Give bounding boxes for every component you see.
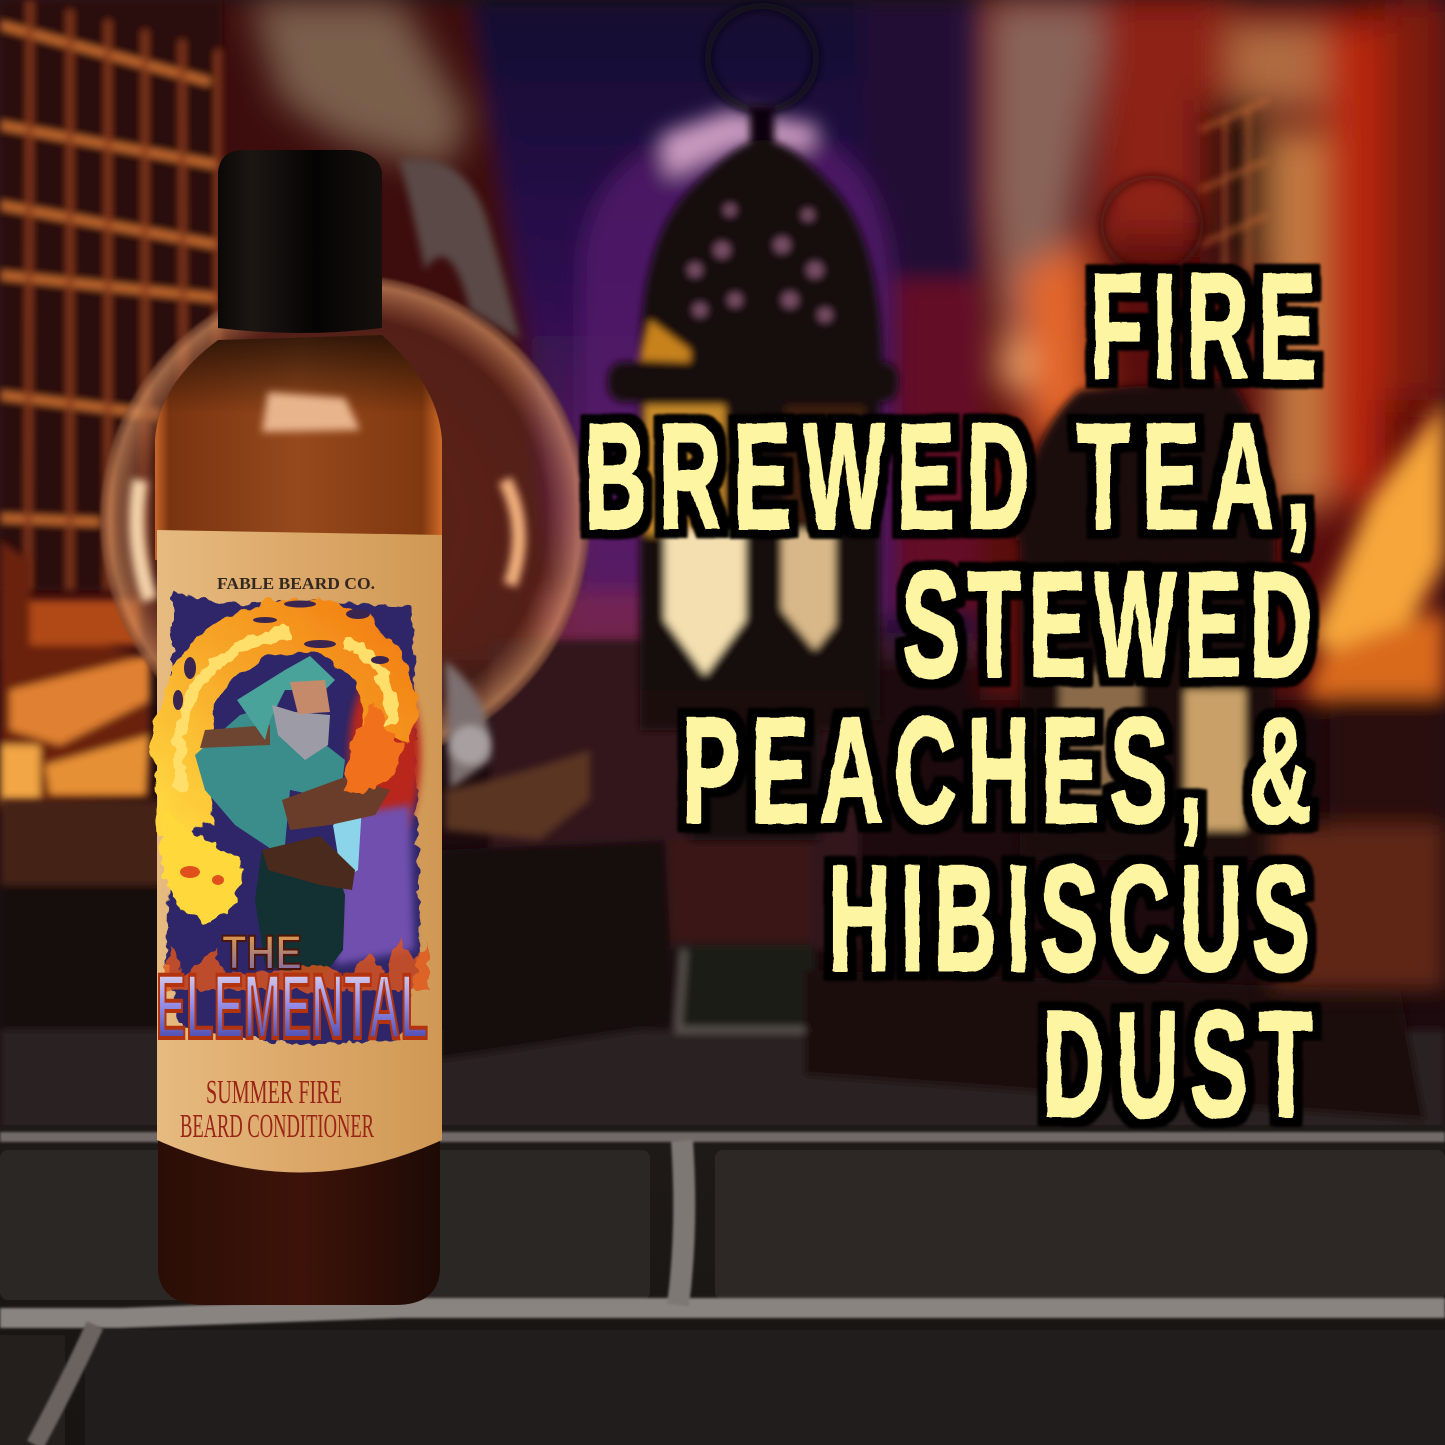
fire ring dark wisps [173,600,389,710]
headline: BREWED TEA, [584,392,1310,560]
headline: STEWED [902,540,1312,708]
bottle base amber [158,1140,440,1305]
fire skull eyes [180,866,224,885]
headline: DUST [1042,980,1312,1148]
label illustration [156,574,428,1145]
background: midground table and ledge [0,640,1445,1130]
splash backdrop [166,592,420,1045]
stone and brick patches [250,0,1445,510]
bottle shading [155,335,442,560]
pale light [333,805,362,880]
wizard cloak [195,705,345,855]
hand fire [345,700,402,795]
headline: FIRE [1090,242,1316,410]
wizard skirt [255,850,345,980]
shoulder strap [200,725,270,748]
title flames [160,940,428,990]
hood [237,656,335,740]
fire ring [179,626,388,830]
product type: BEARD CONDITIONER [180,1108,374,1145]
bottle upper body [155,335,442,560]
background: large lantern [608,6,898,840]
label [157,530,442,1172]
red glow [349,665,421,845]
bottle cap [218,150,382,333]
wizard beard [272,705,330,760]
bracer [282,777,390,830]
background: glowing stairs left [0,540,150,810]
wizard sash [262,836,355,890]
shoulder reflection [262,392,360,432]
fire ring bright core [179,632,392,790]
stone floor [0,1125,1445,1445]
fire skull [161,810,241,922]
background: crystal globe [100,159,590,840]
product bottle: ELEMENTAL [156,956,428,1058]
wizard face [290,680,330,714]
purple wall [335,805,414,965]
product bottle [155,150,442,1305]
headline [584,242,1316,1148]
headline: HIBISCUS [828,834,1310,1002]
title THE: THE [222,927,302,980]
background: barred window left [0,0,222,590]
headline: PEACHES, & [682,686,1312,854]
background: second lantern and right glow [1015,177,1445,990]
brand: FABLE BEARD CO. [217,574,375,593]
product name: SUMMER FIRE [206,1074,342,1111]
background: arch glow [540,110,896,660]
